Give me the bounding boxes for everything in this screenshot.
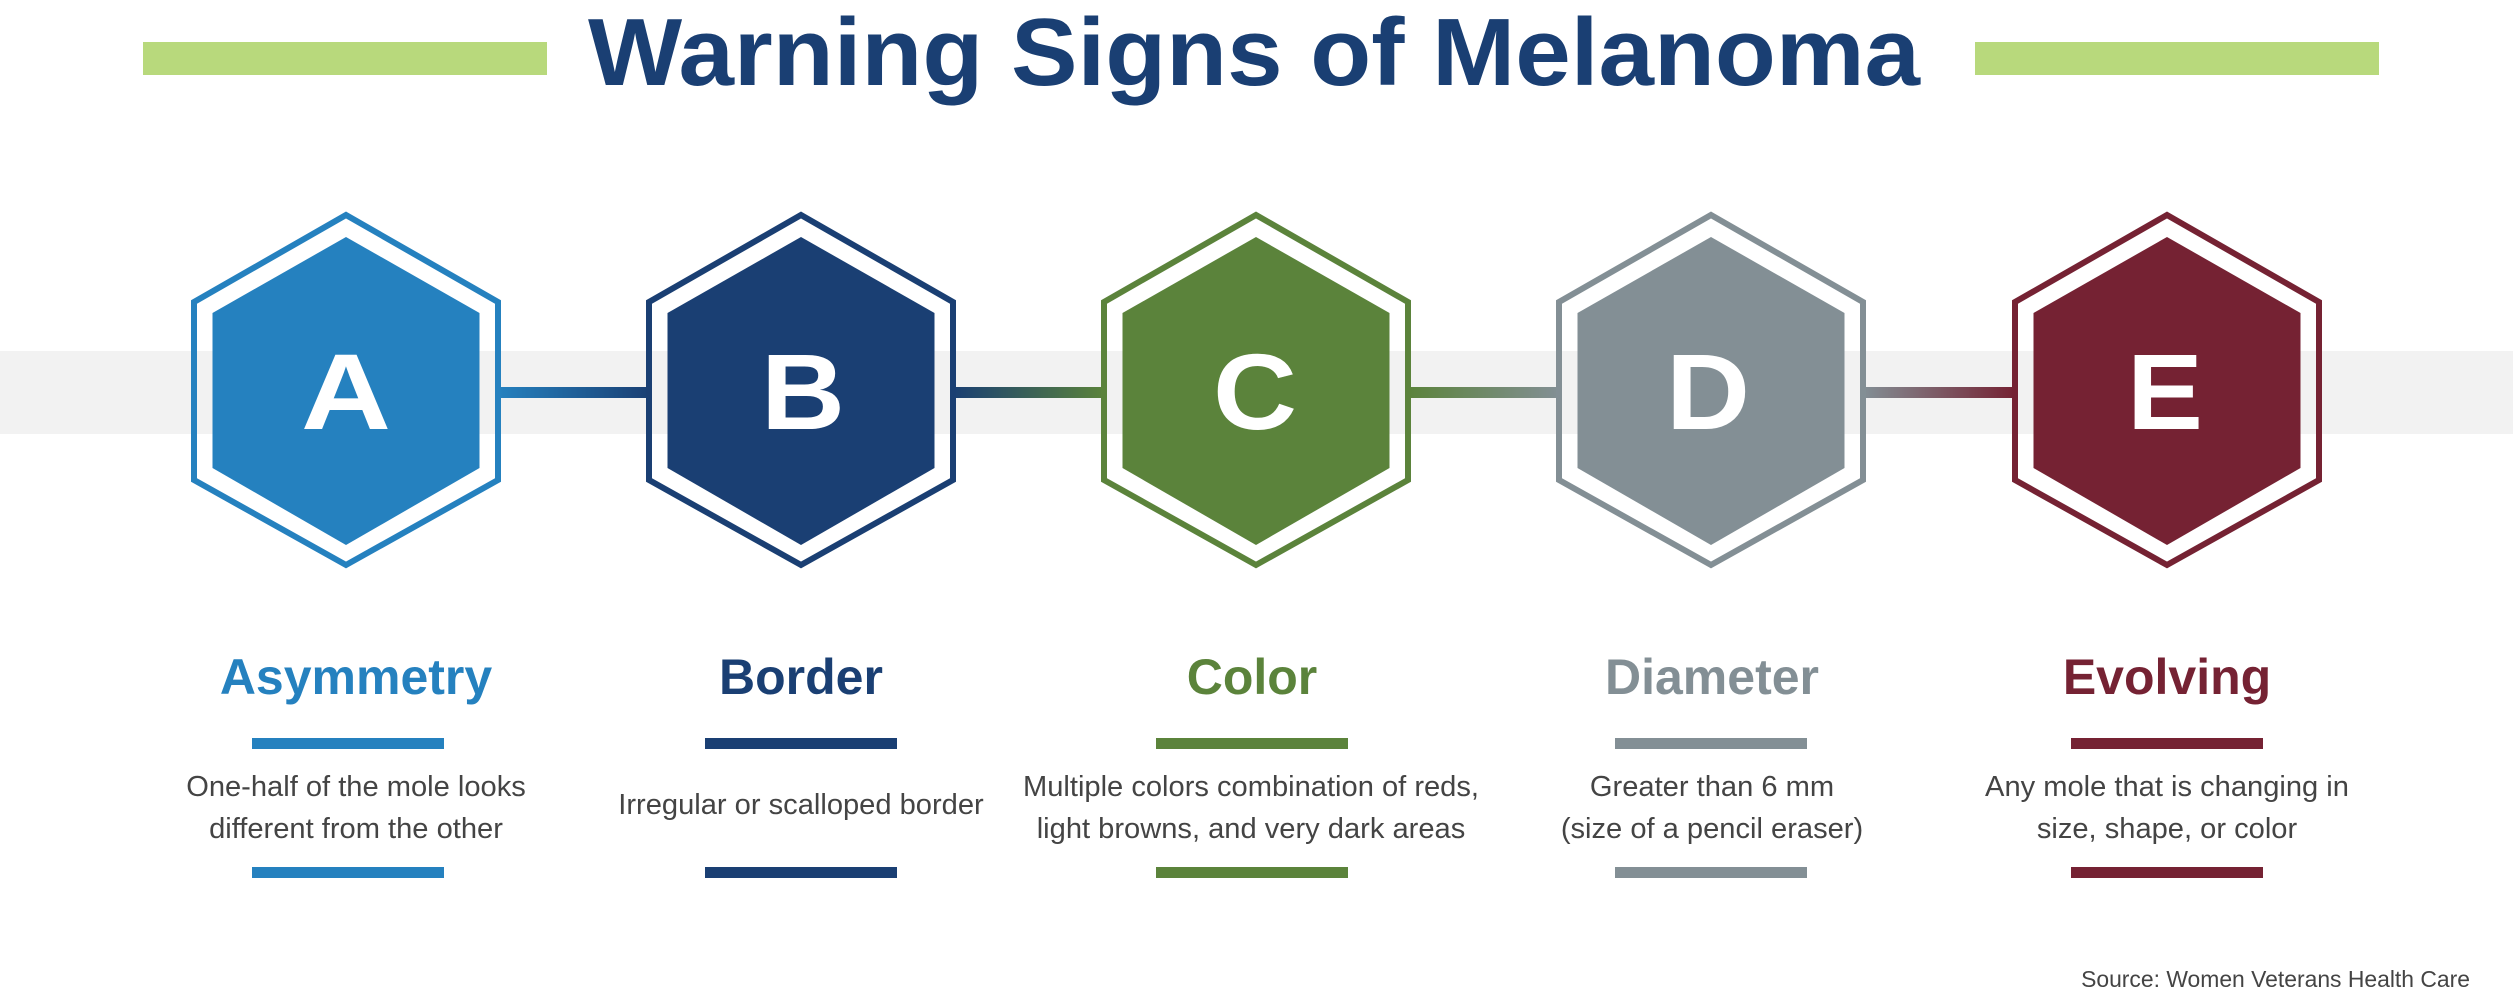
panel: asymmetry xyxy=(186,649,526,878)
panel: color xyxy=(1023,649,1479,878)
panel: diameter: (size of a pencil eraser) xyxy=(1561,813,1863,845)
hexagon D: D xyxy=(1666,331,1750,452)
panel: evolving: size, shape, or color xyxy=(2037,813,2297,845)
panel: evolving: Any mole that is changing in xyxy=(1985,771,2349,803)
panel: color: light browns, and very dark areas xyxy=(1037,813,1465,845)
hexagon C xyxy=(1104,215,1408,565)
hexagon B xyxy=(649,215,953,565)
connector: B to C xyxy=(953,387,1105,398)
hexagon E: E xyxy=(2127,331,2203,452)
title xyxy=(143,0,2379,106)
panel: border: Border xyxy=(719,649,883,705)
panel: diameter xyxy=(1561,649,1863,878)
connector: C to D xyxy=(1408,387,1560,398)
hexagon A: A xyxy=(301,331,391,452)
hexagon C: C xyxy=(1213,331,1297,452)
hexagon E xyxy=(2015,215,2319,565)
panel: diameter: Greater than 6 mm xyxy=(1590,771,1834,803)
hexagon D xyxy=(1559,215,1863,565)
panel: asymmetry: Asymmetry xyxy=(220,649,492,705)
connector: A to B xyxy=(498,387,650,398)
panel: color: Color xyxy=(1187,649,1317,705)
panel: border xyxy=(618,649,984,878)
panel: evolving: Evolving xyxy=(2063,649,2271,705)
panel: asymmetry: One-half of the mole looks xyxy=(186,771,526,803)
panel: asymmetry: different from the other xyxy=(209,813,503,845)
background band xyxy=(0,351,2513,434)
hexagon A xyxy=(194,215,498,565)
panel: border: Irregular or scalloped border xyxy=(618,789,984,821)
panel: diameter: Diameter xyxy=(1605,649,1819,705)
panel: evolving xyxy=(1985,649,2349,878)
hexagon B: B xyxy=(761,331,845,452)
title: Warning Signs of Melanoma xyxy=(588,0,1921,106)
connector: D to E xyxy=(1863,387,2015,398)
panel: color: Multiple colors combination of reds, xyxy=(1023,771,1479,803)
source note: Source: Women Veterans Health Care xyxy=(2081,966,2470,992)
